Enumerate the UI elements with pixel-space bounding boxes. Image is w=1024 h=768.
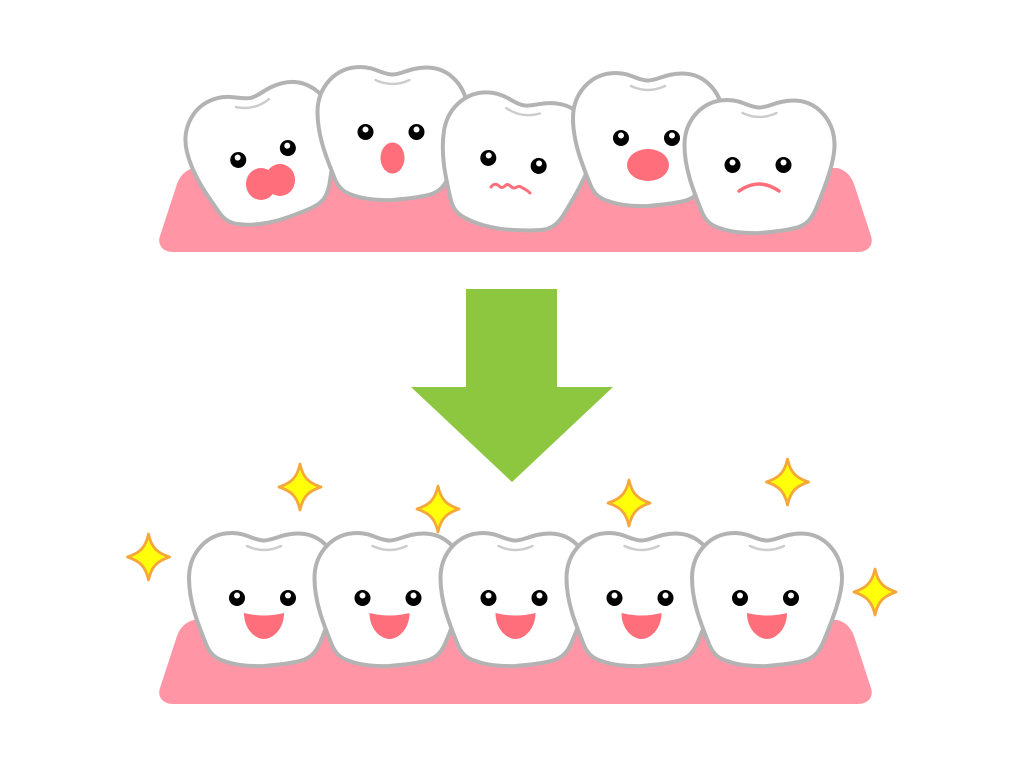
- crooked tooth 3 with wavy mouth: [430, 86, 599, 241]
- sparkles around the straight teeth: [128, 459, 896, 615]
- straight tooth 5: [692, 533, 842, 666]
- straight tooth 1: [189, 533, 339, 666]
- crooked tooth 2 with small round mouth: [318, 67, 468, 200]
- sparkle 2: [279, 464, 321, 510]
- crooked tooth 1 with lumpy mouth: [176, 73, 353, 237]
- top gum: [159, 168, 872, 252]
- top row: crooked teeth: [159, 67, 872, 252]
- bottom row: straight smiling teeth: [159, 533, 872, 704]
- sparkle 5: [766, 459, 808, 505]
- crooked tooth 4 with wide open mouth: [573, 73, 723, 206]
- straight tooth 3: [440, 533, 590, 666]
- straight tooth 2: [314, 533, 464, 666]
- sparkle 4: [608, 480, 650, 526]
- sparkle 6: [854, 569, 896, 615]
- bottom gum: [159, 620, 872, 704]
- sparkle 1: [128, 534, 170, 580]
- straight tooth 4: [566, 533, 716, 666]
- crooked tooth 5 with frown: [684, 100, 834, 233]
- sparkle 3: [417, 486, 459, 532]
- arrow: pointing down: [411, 289, 613, 482]
